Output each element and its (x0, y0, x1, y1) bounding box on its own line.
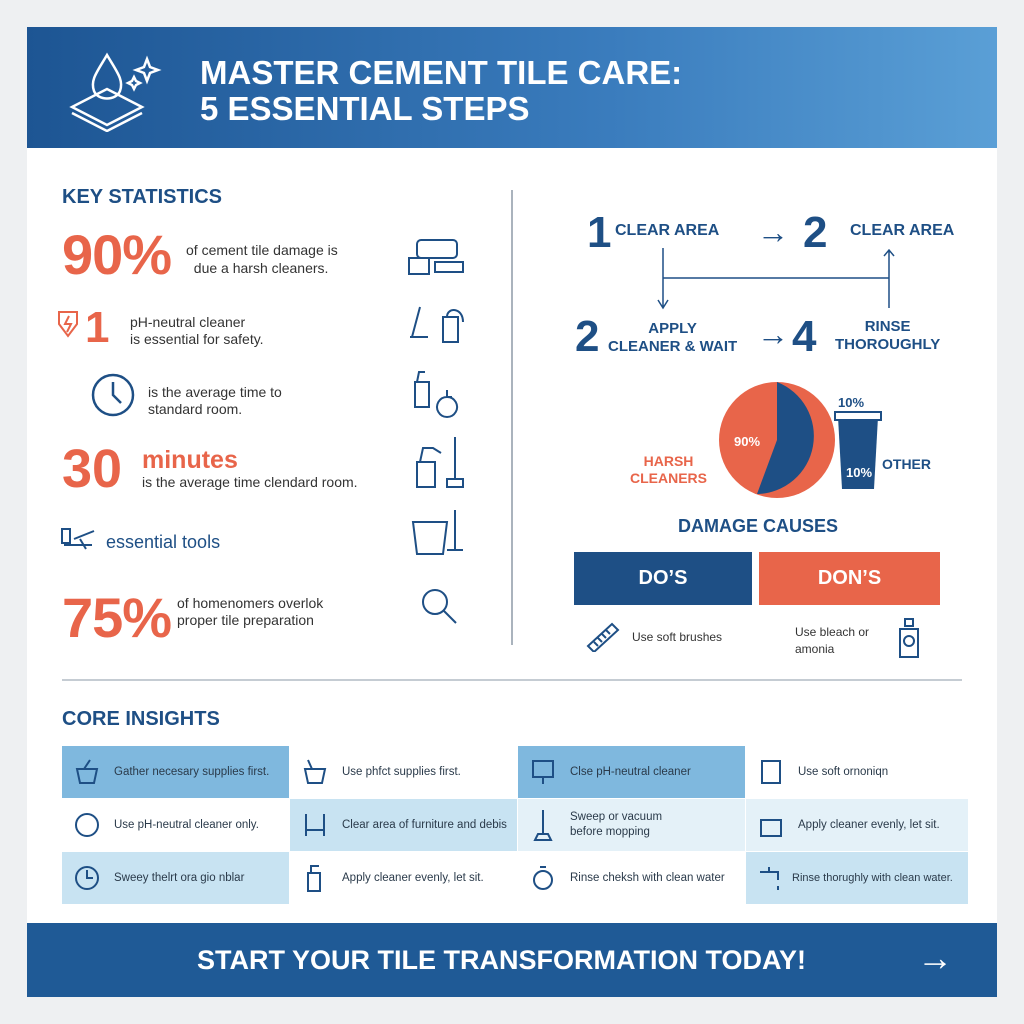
flow diagram: → (757, 316, 789, 352)
pie chart: damage causes: CLEANERS (630, 470, 707, 486)
stat 1: pH-neutral cleaner (130, 314, 245, 330)
footer call to action: START YOUR TILE TRANSFORMATION TODAY! (197, 945, 806, 975)
pie chart: damage causes: 10% (838, 395, 864, 410)
stat 75% (62, 586, 324, 649)
do's box: DO’S (639, 567, 687, 589)
pie chart: damage causes: 10% (846, 465, 872, 480)
icons column (408, 239, 464, 624)
insights grid: Use soft ornoniqn (798, 766, 888, 778)
vertical divider (511, 190, 513, 645)
stat 75%: proper tile preparation (177, 612, 314, 628)
title (200, 54, 682, 127)
insights grid (62, 746, 968, 904)
flow diagram: 2 (803, 208, 827, 257)
flow diagram: CLEAR AREA (850, 222, 954, 239)
stat essential tools (61, 528, 220, 552)
title: MASTER CEMENT TILE CARE: (200, 54, 682, 91)
don'ts box: DON’S (818, 567, 881, 589)
insights grid: before mopping (570, 826, 650, 838)
dont item (795, 618, 919, 658)
horizontal divider (62, 679, 962, 681)
stat 1 (58, 303, 264, 352)
flow diagram: → (757, 214, 789, 250)
insights grid: Sweey thelrt ora gio nblar (114, 872, 244, 884)
header banner (27, 27, 997, 148)
stat 30 minutes (62, 439, 358, 499)
stat clock (92, 374, 282, 417)
stat 90%: of cement tile damage is (186, 242, 338, 258)
arrow: → (917, 937, 953, 978)
do item: Use soft brushes (632, 630, 722, 644)
dont item: Use bleach or (795, 625, 869, 639)
flow diagram: CLEANER & WAIT (608, 338, 737, 355)
stat clock: is the average time to (148, 384, 282, 400)
insights grid: Use pH-neutral cleaner only. (114, 819, 259, 831)
insights grid: Rinse cheksh with clean water (570, 872, 725, 884)
footer call to action (27, 923, 997, 997)
insights grid: Clear area of furniture and debis (342, 819, 507, 831)
pie chart: damage causes: OTHER (882, 456, 931, 472)
stat essential tools: essential tools (106, 532, 220, 552)
insights grid: Rinse thorughly with clean water. (792, 872, 953, 884)
pie chart: damage causes: 90% (734, 434, 760, 449)
stat 90%: due a harsh cleaners. (194, 260, 328, 276)
insights grid: Apply cleaner evenly, let sit. (342, 872, 484, 884)
do's box (574, 552, 752, 605)
insights grid: Apply cleaner evenly, let sit. (798, 819, 940, 831)
flow diagram: 1 (587, 208, 611, 257)
insights grid: Use phfct supplies first. (342, 766, 461, 778)
stat 75%: of homenomers overlok (177, 595, 323, 611)
stat 30 minutes: 30 (62, 439, 122, 499)
flow diagram (575, 208, 954, 361)
title: 5 ESSENTIAL STEPS (200, 90, 529, 127)
stat 90%: 90% (62, 223, 171, 286)
stat clock: standard room. (148, 401, 242, 417)
icon: water drop tile (69, 52, 162, 132)
flow diagram: 2 (575, 312, 599, 361)
don'ts box (759, 552, 940, 605)
stat 1: 1 (85, 303, 109, 352)
insights grid: Sweep or vacuum (570, 811, 662, 823)
insights grid: Gather necesary supplies first. (114, 766, 269, 778)
pie chart: damage causes: HARSH (644, 453, 693, 469)
heading: core insights: CORE INSIGHTS (62, 708, 220, 730)
heading: damage causes: DAMAGE CAUSES (678, 516, 838, 536)
flow diagram: 4 (792, 312, 816, 361)
pie chart: damage causes (630, 382, 931, 498)
stat 1: is essential for safety. (130, 331, 264, 347)
flow diagram: RINSE (865, 318, 911, 335)
flow diagram: APPLY (648, 320, 697, 337)
heading: key statistics: KEY STATISTICS (62, 186, 222, 208)
insights grid: Clse pH-neutral cleaner (570, 766, 691, 778)
flow diagram: THOROUGHLY (835, 336, 940, 353)
stat 30 minutes: is the average time clendard room. (142, 474, 358, 490)
do item (586, 622, 722, 652)
flow diagram: CLEAR AREA (615, 222, 719, 239)
stat 30 minutes: minutes (142, 446, 238, 474)
stat 90% (62, 223, 338, 286)
stat 75%: 75% (62, 586, 171, 649)
dont item: amonia (795, 642, 834, 656)
